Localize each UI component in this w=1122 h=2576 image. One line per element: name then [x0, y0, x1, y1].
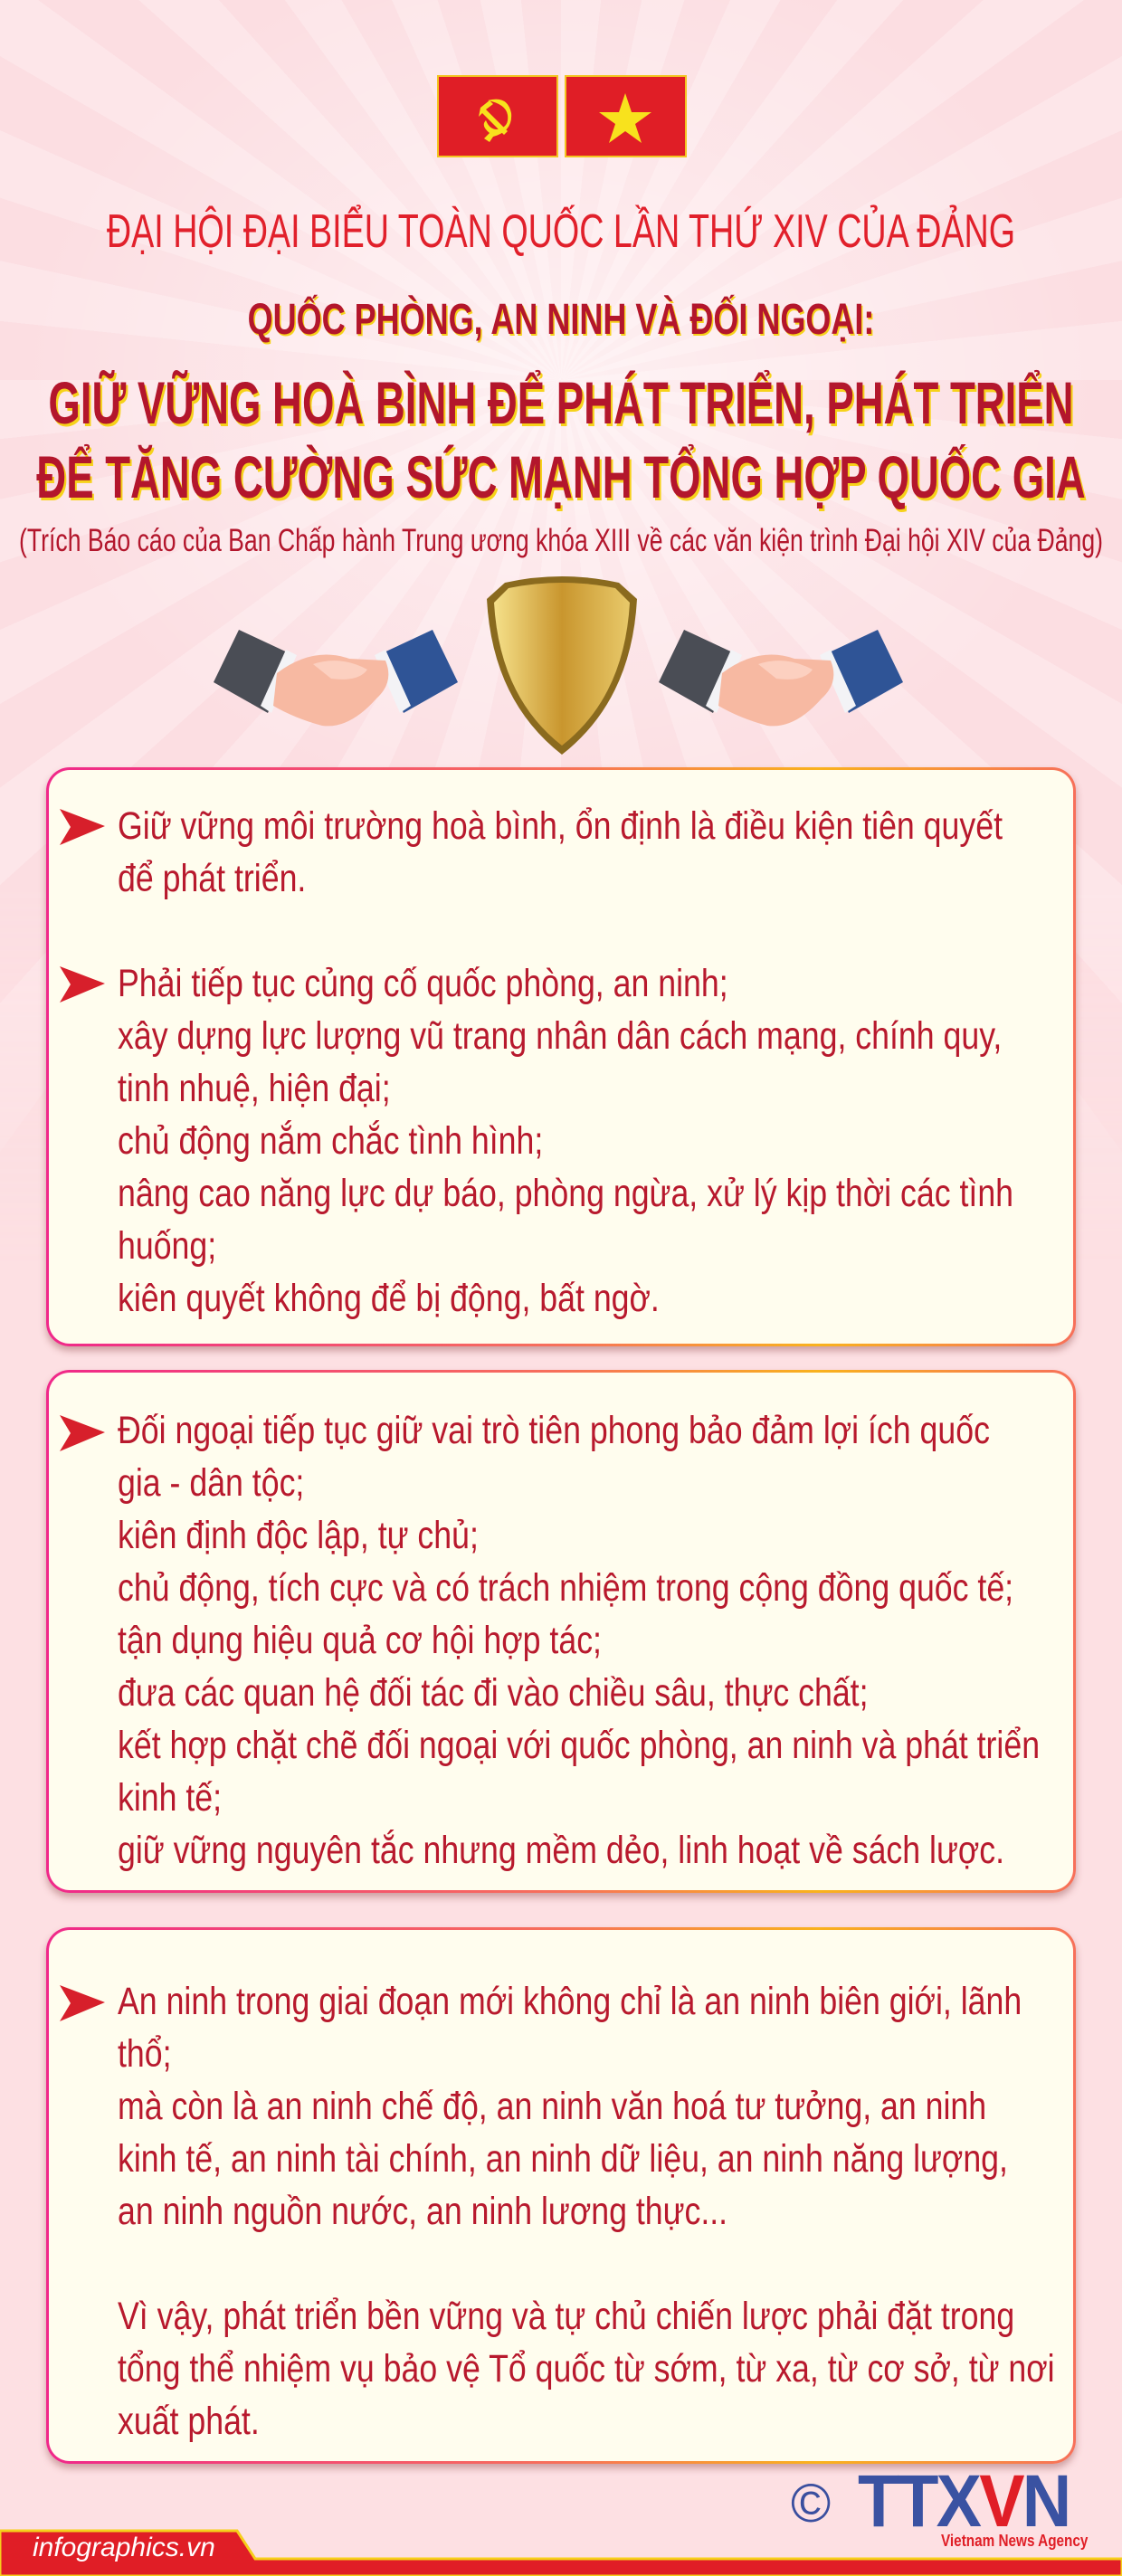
- logo: copyright TTXVN: Vietnam News Agency: [941, 2532, 1088, 2550]
- footer: infographics.vn: [33, 2533, 215, 2562]
- citation: (Trích Báo cáo của Ban Chấp hành Trung ương khóa XIII về các văn kiện trình Đại hội XIV của Đảng): [19, 523, 1103, 558]
- text block: đưa các quan hệ đối tác đi vào chiều sâu, thực chất;: [118, 1671, 869, 1715]
- text block: chủ động, tích cực và có trách nhiệm trong cộng đồng quốc tế;: [118, 1566, 1013, 1610]
- panel: security: [46, 1927, 1076, 2464]
- text block: kinh tế, an ninh tài chính, an ninh dữ liệu, an ninh năng lượng,: [118, 2137, 1008, 2181]
- icon: shield: [487, 576, 637, 755]
- text block: tổng thể nhiệm vụ bảo vệ Tổ quốc từ sớm, từ xa, từ cơ sở, từ nơi: [118, 2347, 1055, 2391]
- footer: [0, 2530, 1122, 2576]
- icon: arrow bullet: [60, 809, 105, 845]
- text block: [118, 804, 1013, 1320]
- text block: huống;: [118, 1224, 216, 1268]
- flag: party: [437, 75, 558, 157]
- icon: handshake right: [659, 630, 903, 726]
- title: congress: ĐẠI HỘI ĐẠI BIỂU TOÀN QUỐC LẦN THỨ XIV CỦA ĐẢNG: [107, 205, 1015, 258]
- subtitle: QUỐC PHÒNG, AN NINH VÀ ĐỐI NGOẠI:: [248, 296, 874, 344]
- flags: [437, 75, 687, 157]
- panel: foreign affairs: [46, 1370, 1076, 1893]
- text block: xuất phát.: [118, 2400, 260, 2443]
- icon: arrow bullet: [60, 966, 105, 1003]
- text block: kết hợp chặt chẽ đối ngoại với quốc phòng, an ninh và phát triển: [118, 1724, 1040, 1767]
- text block: Đối ngoại tiếp tục giữ vai trò tiên phong bảo đảm lợi ích quốc: [118, 1409, 990, 1452]
- text block: thổ;: [118, 2032, 172, 2076]
- icon: handshake left: [214, 630, 458, 726]
- main heading: GIỮ VỮNG HOÀ BÌNH ĐỂ PHÁT TRIỂN, PHÁT TRIỂN: [48, 369, 1074, 436]
- flag: vietnam: [565, 75, 687, 157]
- text block: kiên định độc lập, tự chủ;: [118, 1514, 479, 1557]
- text block: Giữ vững môi trường hoà bình, ổn định là điều kiện tiên quyết: [118, 804, 1003, 848]
- logo: copyright TTXVN: TTXVN: [858, 2460, 1069, 2543]
- text block: xây dựng lực lượng vũ trang nhân dân cách mạng, chính quy,: [118, 1014, 1002, 1058]
- text block: nâng cao năng lực dự báo, phòng ngừa, xử lý kịp thời các tình: [118, 1172, 1013, 1215]
- text block: Phải tiếp tục củng cố quốc phòng, an ninh;: [118, 962, 728, 1005]
- text block: gia - dân tộc;: [118, 1461, 304, 1505]
- text block: chủ động nắm chắc tình hình;: [118, 1119, 543, 1163]
- logo: copyright TTXVN: ©: [791, 2473, 831, 2533]
- text block: [118, 1980, 1055, 2443]
- main heading: [36, 369, 1086, 512]
- text block: mà còn là an ninh chế độ, an ninh văn hoá tư tưởng, an ninh: [118, 2085, 986, 2128]
- text block: [118, 1409, 1040, 1872]
- panel: peace and defense: [46, 767, 1076, 1346]
- icon: arrow bullet: [60, 1415, 105, 1451]
- text block: kinh tế;: [118, 1776, 222, 1820]
- logo: copyright TTXVN: [791, 2460, 1088, 2550]
- text block: an ninh nguồn nước, an ninh lương thực...: [118, 2190, 727, 2233]
- text block: Vì vậy, phát triển bền vững và tự chủ chiến lược phải đặt trong: [118, 2295, 1014, 2338]
- icon: arrow bullet: [60, 1985, 105, 2021]
- text block: tận dụng hiệu quả cơ hội hợp tác;: [118, 1619, 602, 1662]
- main heading: ĐỂ TĂNG CƯỜNG SỨC MẠNH TỔNG HỢP QUỐC GIA: [36, 443, 1086, 510]
- text block: kiên quyết không để bị động, bất ngờ.: [118, 1277, 660, 1320]
- text block: để phát triển.: [118, 857, 306, 900]
- text block: tinh nhuệ, hiện đại;: [118, 1067, 391, 1110]
- text block: An ninh trong giai đoạn mới không chỉ là an ninh biên giới, lãnh: [118, 1980, 1022, 2023]
- text block: giữ vững nguyên tắc nhưng mềm dẻo, linh hoạt về sách lược.: [118, 1829, 1004, 1872]
